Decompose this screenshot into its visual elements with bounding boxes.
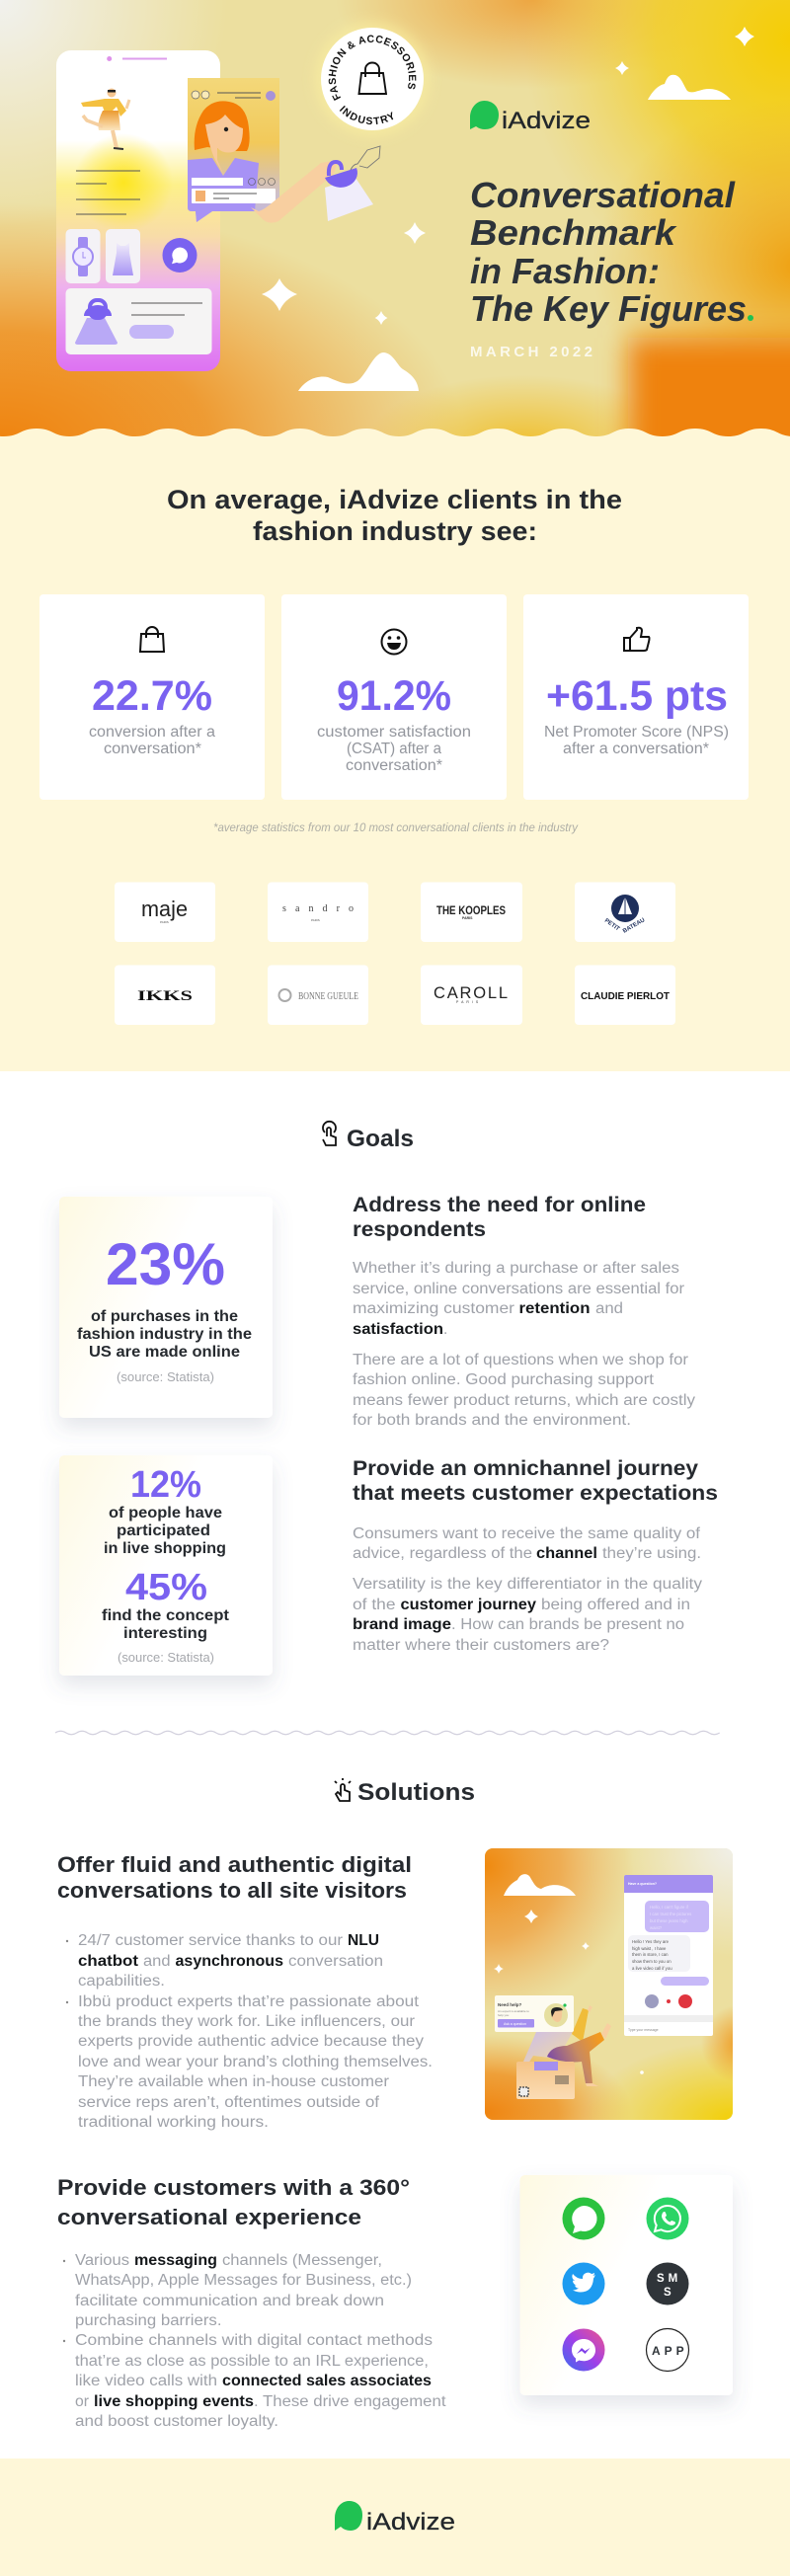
chat window: show them to you on [632, 1959, 672, 1964]
panel: conversion stat: conversion after a [89, 724, 215, 741]
text block: 360 conversational experience: WhatsApp, Apple Messages for Business, etc.) [75, 2272, 412, 2289]
icon: sms: S [664, 2287, 672, 2299]
badge: fashion and accessories industry: INDUSTRY [340, 105, 393, 124]
panel: satisfaction stat: 91.2% [337, 672, 451, 720]
panel: live shopping stats: participated [117, 1522, 210, 1539]
text block: address the need for online respondents: Whether it’s during a purchase or after sales [353, 1260, 679, 1277]
panel: live shopping stats: of people have [109, 1505, 222, 1522]
panel: live shopping stats: (source: Statista) [118, 1650, 214, 1665]
text block: address the need for online respondents: . [443, 1321, 447, 1338]
text block: 360 conversational experience: channels (Messenger, [222, 2252, 382, 2269]
logo: the kooples [421, 883, 522, 942]
panel: 23% online purchases: 23% [106, 1231, 225, 1297]
text block: 360 conversational experience: like video calls with [75, 2373, 217, 2389]
icon: tap finger with sparks [335, 1778, 351, 1801]
text block: 360 conversational experience: messaging [134, 2252, 217, 2269]
dancing figure [81, 89, 129, 149]
logo: petit bateau: PETIT [603, 918, 620, 933]
logo: bonne gueule [268, 966, 368, 1025]
icon: clouds and sparkles [262, 27, 754, 391]
panel: NPS stat: +61.5 pts [546, 672, 728, 720]
logo: maje: PARIS [160, 920, 169, 924]
panel: 23% online purchases: fashion industry in the [77, 1326, 252, 1343]
text block: omnichannel journey: channel [536, 1545, 597, 1562]
text block: fluid and authentic digital conversations: 24/7 customer service thanks to our [78, 1932, 343, 1949]
text block: 360 conversational experience: that’re as close as possible to an IRL experience, [75, 2353, 429, 2370]
icon: sms [646, 2263, 689, 2304]
chat window: waist? [650, 1925, 663, 1930]
chat window: Hello, I can't figure if [650, 1905, 689, 1910]
panel: 23% online purchases [59, 1197, 273, 1418]
text block: 360 conversational experience: Combine channels with digital contact methods [75, 2332, 433, 2349]
panel: satisfaction stat: conversation* [346, 757, 442, 774]
hero section background [0, 0, 790, 436]
icon: app: APP [652, 2344, 688, 2358]
footnote: *average statistics from our 10 most conversational clients in the industry [213, 822, 579, 834]
chat window: Have a question? [628, 1882, 657, 1886]
logo: iAdvize footer [335, 2501, 455, 2536]
icon: sms: SM [657, 2273, 681, 2285]
need help card: help you [498, 2013, 510, 2017]
panel: NPS stat: Net Promoter Score (NPS) [544, 724, 729, 741]
chat window [624, 1875, 713, 2036]
footer band [0, 2459, 790, 2576]
panel: conversion stat: 22.7% [92, 672, 212, 720]
icon: messenger [563, 2328, 604, 2372]
panel: 23% online purchases: US are made online [89, 1344, 240, 1361]
text block: 360 conversational experience: and boost customer loyalty. [75, 2413, 278, 2430]
text block: address the need for online respondents: maximizing customer [353, 1300, 514, 1317]
title: Conversational [470, 175, 736, 215]
logo: sandro [268, 883, 368, 942]
icon: chat channel [563, 2198, 604, 2239]
text block: omnichannel journey: Versatility is the key differentiator in the quality [353, 1576, 702, 1593]
text block: 360 conversational experience: facilitate communication and break down [75, 2293, 384, 2309]
panel: satisfaction stat [281, 594, 507, 800]
need help card: Need help? [498, 2002, 522, 2007]
logo: iAdvize: iAdvize [502, 108, 591, 134]
text block: address the need for online respondents: retention [519, 1300, 591, 1317]
text block: omnichannel journey: customer journey [401, 1597, 536, 1613]
text block: address the need for online respondents: for both brands and the environment. [353, 1412, 631, 1429]
heading: goals: Goals [347, 1126, 414, 1152]
chat window: Type your message [628, 2028, 659, 2032]
text block: address the need for online respondents: fashion online. Good purchasing support [353, 1371, 655, 1388]
logo: the kooples: PARIS [462, 916, 473, 920]
need help card: Ask a question [504, 2022, 526, 2026]
panel: messaging channels [519, 2175, 733, 2395]
clouds and sparkles [494, 1874, 644, 2074]
text block: omnichannel journey: being offered and in [541, 1597, 690, 1613]
text block: fluid and authentic digital conversations: love and wear your brand’s clothing themselves. [78, 2054, 433, 2070]
text block: omnichannel journey: they’re using. [602, 1545, 701, 1562]
heading: on average [167, 485, 622, 546]
need help card: An expert is available to [498, 2009, 529, 2013]
text block: fluid and authentic digital conversations: asynchronous [176, 1953, 283, 1970]
text block: 360 conversational experience: conversational experience [57, 2205, 361, 2229]
panel: 23% online purchases: of purchases in the [91, 1308, 238, 1325]
text block: address the need for online respondents: satisfaction [353, 1321, 443, 1338]
panel: NPS stat: after a conversation* [563, 741, 709, 757]
panel: satisfaction stat: customer satisfaction [317, 724, 471, 741]
text block: 360 conversational experience: connected sales associates [222, 2373, 432, 2389]
text block: 360 conversational experience: or [75, 2393, 89, 2410]
text block: address the need for online respondents: service, online conversations are essential for [353, 1281, 684, 1297]
heading: on average: On average, iAdvize clients in the [167, 485, 622, 514]
text block: omnichannel journey: matter where their customers are? [353, 1637, 609, 1654]
logo: the kooples: THE KOOPLES [436, 905, 506, 917]
text block: address the need for online respondents: Address the need for online [353, 1194, 646, 1216]
text block: address the need for online respondents [353, 1194, 695, 1429]
title [470, 175, 753, 329]
text block: fluid and authentic digital conversations: and [143, 1953, 170, 1970]
text block: fluid and authentic digital conversations: NLU [348, 1932, 379, 1949]
chat button [162, 238, 198, 273]
text block: omnichannel journey: Consumers want to receive the same quality of [353, 1525, 701, 1542]
panel: live shopping stats [59, 1455, 273, 1676]
text block: fluid and authentic digital conversations: traditional working hours. [78, 2114, 269, 2131]
panel: live shopping stats: in live shopping [104, 1540, 226, 1557]
title: Benchmark [470, 212, 677, 253]
text block: fluid and authentic digital conversations: They’re available when in-house customer [78, 2073, 389, 2090]
text block: fluid and authentic digital conversations: Offer fluid and authentic digital [57, 1852, 412, 1877]
text block: fluid and authentic digital conversations: experts provide authentic advice because they [78, 2033, 424, 2050]
icon: whatsapp [646, 2198, 689, 2239]
logo: iAdvize footer: iAdvize [366, 2509, 455, 2536]
customer sitting on parcel [516, 2005, 611, 2099]
panel: satisfaction stat: (CSAT) after a [347, 741, 441, 757]
heading: solutions: Solutions [357, 1779, 475, 1806]
text block: fluid and authentic digital conversations: the brands they work for. Like influencers, our [78, 2013, 415, 2030]
watch card [65, 229, 101, 283]
text block: omnichannel journey: of the [353, 1597, 395, 1613]
text block: fluid and authentic digital conversations: service reps aren’t, oftentimes outside of [78, 2094, 380, 2111]
logo: petit bateau: BATEAU [622, 917, 646, 935]
text block: omnichannel journey: brand image [353, 1616, 451, 1633]
text block: fluid and authentic digital conversations: conversations to all site visitors [57, 1878, 407, 1903]
badge: fashion and accessories industry: FASHION & ACCESSORIES [328, 36, 417, 101]
panel: conversion stat [40, 594, 265, 800]
icon: smile [381, 630, 407, 654]
text block: omnichannel journey [353, 1457, 718, 1654]
text block: omnichannel journey: that meets customer expectations [353, 1482, 718, 1505]
need help card [495, 1995, 574, 2032]
logo: iAdvize [470, 101, 591, 134]
badge: fashion and accessories industry [320, 23, 426, 131]
icon: shopping bag [140, 627, 164, 652]
panel: live shopping stats: find the concept [102, 1607, 229, 1624]
text block: 360 conversational experience: purchasing barriers. [75, 2312, 221, 2329]
chat window: high waist , I have [632, 1946, 667, 1951]
chat window: a live video call if you [632, 1966, 672, 1971]
logo: caroll: CAROLL [434, 984, 508, 1002]
text block: address the need for online respondents: means fewer product returns, which are costly [353, 1392, 695, 1409]
icon: thumbs up [624, 628, 650, 651]
title: The Key Figures [470, 288, 747, 329]
logo: claudie pierlot [575, 966, 675, 1025]
icon: app [646, 2328, 689, 2372]
chat window: them in store, I can [632, 1952, 669, 1957]
chat window: I can trust the pictures [650, 1912, 691, 1916]
panel: live shopping stats: interesting [123, 1625, 207, 1642]
logo: sandro: PARIS [311, 918, 320, 922]
text block: 360 conversational experience: . These drive engagement [254, 2393, 446, 2410]
logo: petit bateau [575, 883, 675, 942]
panel: 23% online purchases: (source: Statista) [117, 1369, 214, 1384]
text block: 360 conversational experience: Provide customers with a 360° [57, 2175, 410, 2200]
illustration: chat and customer on parcel [485, 1848, 733, 2120]
logo: ikks: IKKS [137, 988, 193, 1004]
illustration: live video panel with presenter [188, 78, 279, 222]
text block: fluid and authentic digital conversations: chatbot [78, 1953, 138, 1970]
dress card [106, 229, 140, 283]
text block: omnichannel journey: . How can brands be present no [451, 1616, 684, 1633]
text block: 360 conversational experience: live shopping events [94, 2393, 254, 2410]
text block: address the need for online respondents: respondents [353, 1218, 486, 1241]
panel: live shopping stats: 12% [130, 1464, 201, 1506]
text block: fluid and authentic digital conversations: capabilities. [78, 1973, 165, 1990]
logo: caroll: PARIS [456, 1000, 481, 1004]
text block: fluid and authentic digital conversations: conversation [288, 1953, 383, 1970]
text block: omnichannel journey: advice, regardless of the [353, 1545, 532, 1562]
panel: conversion stat: conversation* [104, 741, 201, 757]
logo: ikks [115, 966, 215, 1025]
icon: shopping bag [359, 63, 386, 94]
text block: address the need for online respondents: There are a lot of questions when we shop for [353, 1352, 688, 1368]
text placeholder lines [76, 171, 140, 214]
logo: caroll [421, 966, 522, 1025]
logo: sandro: sandro [282, 903, 354, 914]
client logos [115, 883, 675, 1025]
product card [65, 288, 211, 354]
panel: NPS stat [523, 594, 749, 800]
heading: goals [323, 1122, 414, 1152]
text block: fluid and authentic digital conversations: Ibbü product experts that’re passionate about [78, 1993, 420, 2010]
logo: bonne gueule: BONNE GUEULE [298, 990, 358, 1002]
logo: maje: maje [141, 897, 188, 921]
illustration: phone screen [56, 50, 220, 371]
text block: 360 conversational experience [57, 2175, 446, 2430]
text block: address the need for online respondents: and [595, 1300, 623, 1317]
title: in Fashion: [470, 251, 660, 291]
heading: on average: fashion industry see: [253, 516, 537, 546]
icon: tap finger [323, 1122, 336, 1145]
chat window: Hello ! Yes they are [632, 1939, 670, 1944]
text block: omnichannel journey: Provide an omnichannel journey [353, 1457, 698, 1480]
text block: fluid and authentic digital conversations [57, 1852, 433, 2131]
text block: 360 conversational experience: Various [75, 2252, 129, 2269]
date: MARCH 2022 [470, 344, 592, 360]
illustration: arm holding bag with price tag [251, 146, 380, 223]
logo: claudie pierlot: CLAUDIE PIERLOT [581, 990, 671, 1002]
stats section background with wavy top [0, 429, 790, 1071]
logo: maje [115, 883, 215, 942]
panel: live shopping stats: 45% [125, 1567, 207, 1608]
icon: twitter [563, 2263, 604, 2304]
chat window: but these jeans high [650, 1918, 688, 1923]
